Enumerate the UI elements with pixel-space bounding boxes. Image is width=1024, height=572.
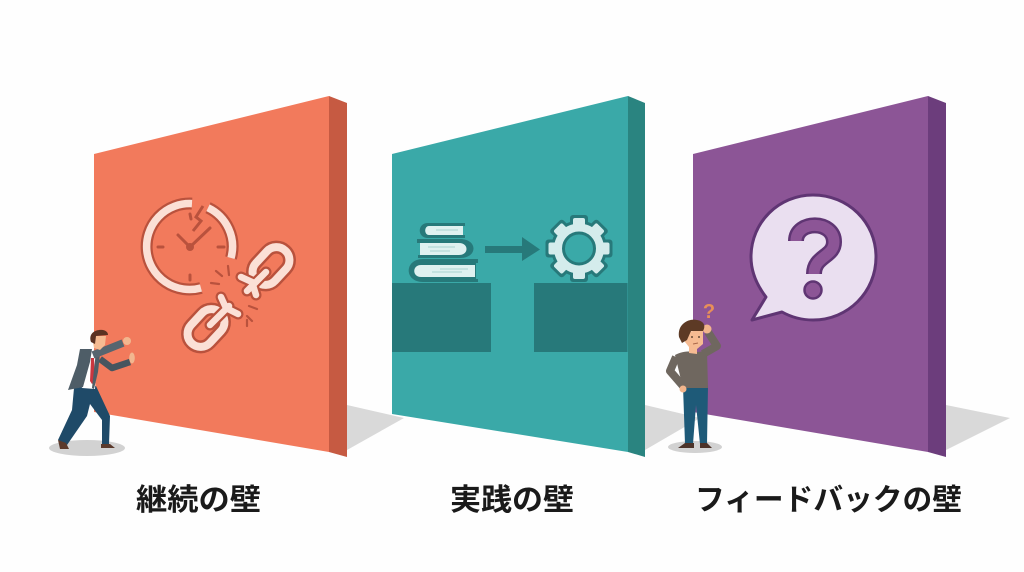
wall shadow	[347, 405, 404, 450]
wall shadow	[645, 405, 700, 450]
figure: confused man	[668, 301, 722, 453]
wall side	[928, 96, 946, 457]
wall side	[628, 96, 645, 457]
wall front	[392, 96, 628, 452]
panel: wall of continuity	[49, 96, 404, 457]
icon: gear	[546, 215, 612, 282]
panel: wall of practice	[392, 96, 700, 457]
wall front	[693, 96, 928, 452]
icon: broken clock	[147, 204, 233, 290]
icon: broken chain	[182, 242, 295, 352]
block: practice ledge	[534, 283, 628, 352]
wall side	[329, 96, 347, 457]
wall shadow	[946, 405, 1010, 450]
heading: practice wall: 実践の壁	[450, 484, 574, 517]
figure: businessman pushing the wall	[49, 330, 135, 456]
heading: feedback wall: フィードバックの壁	[695, 484, 962, 517]
wall front	[94, 96, 329, 452]
question mark: ?	[703, 301, 715, 323]
arrow: theory to practice	[485, 237, 540, 261]
block: theory ledge	[392, 283, 491, 352]
heading: continuity wall: 継続の壁	[136, 484, 261, 517]
icon: stack of books	[409, 223, 478, 282]
icon: speech bubble with question mark	[751, 195, 876, 320]
panel: wall of feedback	[668, 96, 1010, 457]
